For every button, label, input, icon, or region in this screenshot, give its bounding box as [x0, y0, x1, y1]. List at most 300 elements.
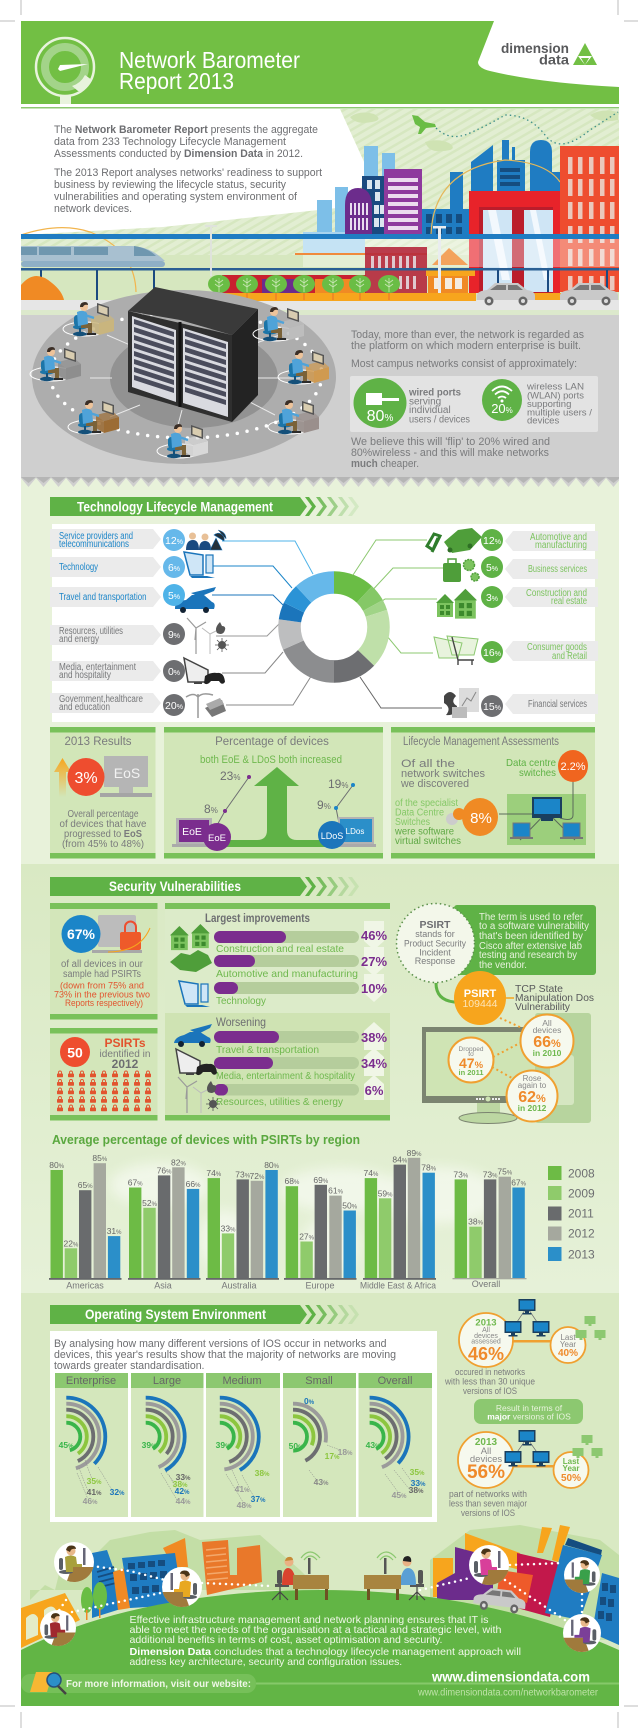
header banner: [21, 21, 619, 108]
intro text: [54, 124, 322, 215]
website bar: [21, 1670, 619, 1698]
chart: Medium: [181, 1373, 280, 1517]
closing text: address key architecture, security and configuration issues.: [130, 1656, 402, 1668]
icon: fountain: [21, 276, 70, 306]
panel: lifecycle management assessments: Switches: [395, 817, 430, 828]
callout: PSIRT definition: Incident: [419, 948, 451, 958]
chart: Enterprise: 46%: [83, 1496, 98, 1506]
chart: Overall: 38%: [409, 1485, 424, 1495]
sector chart panel: Consumer goods: [527, 642, 587, 653]
chart: Medium: 41%: [235, 1484, 250, 1494]
chart: Small: 50%: [289, 1441, 304, 1451]
bar chart: Middle East and Africa: 89%: [407, 1148, 422, 1158]
bar chart: Overall: Overall: [472, 1279, 500, 1289]
bar labels: Technology: [216, 995, 267, 1007]
heading: Security Vulnerabilities: [109, 878, 241, 894]
bar chart: Overall: 38%: [468, 1217, 484, 1227]
callout: PSIRT 109444: Vulnerability: [515, 1001, 571, 1013]
callout: PSIRT definition: The term is used to refer: [479, 912, 584, 923]
panel: 2013 results: [50, 727, 156, 858]
callout: 46 percent: devices: [474, 1333, 498, 1340]
intro text: network devices.: [54, 203, 132, 215]
text: campus networks: Most campus networks consist of approximately:: [351, 358, 577, 370]
sector chart panel: and Retail: [552, 651, 587, 662]
city scene: [21, 109, 619, 320]
chart: Small: 17%: [325, 1451, 340, 1461]
bar chart: Australia: 80%: [264, 1160, 280, 1170]
bar chart: Overall: [452, 1167, 527, 1289]
chart: Large: 38%: [173, 1479, 188, 1489]
LDoS device: 19%: [328, 777, 348, 791]
panel: 50 PSIRTs: identified in: [100, 1049, 150, 1060]
panel: lifecycle management assessments: 8%: [470, 810, 492, 827]
text: flip: [351, 436, 550, 470]
callout: PSIRT definition: Cisco after extensive lab: [479, 941, 582, 952]
left percent circles: 0%: [168, 666, 180, 678]
percentages: 46%: [361, 928, 387, 943]
text: flip: 80%wireless - and this will make networks: [351, 447, 549, 459]
wired ports: [354, 378, 470, 428]
callout: 56 percent: 2013: [475, 1437, 498, 1448]
panel: technology lifecycle management: [21, 487, 619, 864]
bar chart: Middle East and Africa: [360, 1148, 437, 1290]
stat bubble: 62 percent: again to: [518, 1081, 547, 1090]
closing text: Effective infrastructure management and network planning ensures that IT is: [130, 1614, 488, 1626]
right percent circles: 5%: [486, 562, 498, 574]
bar chart: Middle East and Africa: 74%: [363, 1168, 379, 1178]
chart: Small: Small: [305, 1375, 333, 1387]
bar labels: Automotive and manufacturing: [216, 968, 358, 980]
bar chart: Asia: [128, 1157, 201, 1290]
wireless ports: devices: [527, 416, 559, 426]
panel: 67 percent: [50, 903, 158, 1020]
bar chart: Asia: 67%: [128, 1178, 143, 1188]
sector chart panel: [50, 524, 598, 722]
panel: 67 percent: 73% in the previous two: [54, 990, 150, 1000]
closing text: able to meet the needs of the organisation at a tactical and strategic level, with: [130, 1624, 502, 1636]
chart: Enterprise: 35%: [87, 1476, 102, 1486]
wired ports: individual: [409, 405, 451, 416]
bar chart: Asia: 76%: [157, 1165, 172, 1175]
sector chart panel: Construction and: [526, 588, 587, 599]
network dots: [58, 1563, 582, 1620]
panel: 50 PSIRTs: 50: [67, 1044, 83, 1060]
chart: Large: 44%: [176, 1496, 191, 1506]
left percent circles: 20%: [165, 700, 183, 712]
pill: major versions: [474, 1399, 583, 1424]
sector chart panel: and hospitality: [59, 670, 111, 681]
donut chart: [290, 582, 378, 672]
heading: [50, 1305, 359, 1324]
bar chart: Australia: 73%: [235, 1169, 251, 1179]
white panel with charts: towards greater standardisation.: [54, 1360, 204, 1372]
people in circles: [40, 1542, 601, 1652]
monitor and tablet graphic: [422, 1013, 591, 1124]
panel: 2013 results: progressed to EoS: [64, 829, 142, 840]
monorail and train: [21, 225, 619, 300]
sector chart panel: Automotive and: [530, 532, 587, 543]
website bar: For more information, visit our website:: [66, 1678, 251, 1690]
panel: operating system environment: [21, 1293, 619, 1706]
stat bubble: 66 percent: All: [542, 1018, 552, 1028]
callout: PSIRT definition: PSIRT: [420, 919, 451, 931]
legend: 2013: [568, 1248, 595, 1262]
chart: Medium: 39%: [216, 1440, 231, 1450]
left percent circles: [163, 529, 185, 716]
bar chart: Middle East and Africa: 84%: [392, 1155, 408, 1165]
sector chart panel: Business services: [528, 564, 587, 575]
progress bars: [214, 931, 359, 1096]
panel: 50 PSIRTs: 2012: [112, 1057, 139, 1071]
callout: 46 percent: Year: [560, 1340, 576, 1349]
intro text: business by reviewing the lifecycle status, security: [54, 179, 286, 191]
chart: Enterprise: [27, 1373, 128, 1517]
sector chart panel: telecommunications: [59, 539, 129, 550]
EoE device: EoE: [208, 833, 226, 844]
bar chart: Americas: 85%: [92, 1153, 108, 1163]
panel: 67 percent: (down from 75% and: [60, 980, 144, 990]
stat bubble: 62 percent: [506, 1070, 558, 1122]
bar chart: Europe: 50%: [342, 1200, 358, 1210]
bar chart: Europe: Europe: [305, 1280, 335, 1290]
panel: lifecycle management assessments: [391, 727, 595, 858]
right percent circles: 16%: [483, 647, 501, 659]
left percent circles: 12%: [165, 535, 183, 547]
stat bubble: 62 percent: Rose: [523, 1074, 542, 1083]
EoE device: EoE: [182, 826, 202, 838]
bar chart: Australia: 33%: [221, 1223, 236, 1233]
trees: [208, 275, 400, 300]
intro text: vulnerabilities and operating system environment of: [54, 191, 298, 203]
bar chart: Americas: [49, 1153, 122, 1290]
car: [473, 1586, 527, 1615]
sector chart panel: Media, entertainment: [59, 662, 136, 673]
panel: 2013 results: EoS: [114, 765, 140, 781]
person at desk: left: [272, 1552, 329, 1600]
panel: 67 percent: of all devices in our: [61, 959, 144, 970]
bar chart: Europe: [284, 1175, 358, 1290]
panel: 67 percent: Reports respectively): [65, 998, 143, 1008]
wireless ports: wireless LAN: [526, 382, 584, 392]
bar labels: Travel & transportation: [216, 1044, 319, 1056]
bar chart: Americas: 80%: [49, 1160, 65, 1170]
callout: PSIRT 109444: Manipulation Dos: [515, 992, 594, 1004]
green hill: [21, 1590, 619, 1706]
panel: network: [21, 287, 619, 487]
icon: magnifier: [30, 1672, 66, 1694]
sector chart panel: Service providers and: [59, 531, 133, 542]
EoE device: 8%: [204, 802, 218, 816]
chart: Enterprise: 45%: [59, 1440, 74, 1450]
bar chart: Americas: 65%: [78, 1180, 93, 1190]
panel: lifecycle management assessments: virtual switches: [395, 836, 461, 847]
pill: major versions: Result in terms of: [496, 1403, 563, 1413]
chart: Medium: Medium: [222, 1375, 262, 1387]
callout: PSIRT definition: testing and research by: [479, 950, 577, 961]
text: flip: We believe this will 'flip' to 20% wired and: [351, 436, 550, 448]
text: campus networks: [351, 329, 584, 370]
closing text: [130, 1614, 521, 1668]
panel: percentage of devices: both EoE & LDoS both increased: [200, 754, 342, 766]
panel: 2013 results: 3%: [74, 770, 98, 787]
intro text: The 2013 Report analyses networks' readiness to support: [54, 167, 322, 179]
callout: PSIRT 109444: 109444: [462, 998, 498, 1010]
bar chart: Middle East and Africa: 59%: [378, 1188, 393, 1198]
panel: 2013 results: Overall percentage: [68, 809, 139, 820]
callout: 56 percent: Year: [563, 1464, 579, 1473]
panel: 2013 results: (from 45% to 48%): [62, 839, 144, 850]
callout: 46 percent: [459, 1299, 606, 1367]
wireless ports: 20%: [491, 401, 513, 416]
intro text: The Network Barometer Report presents the aggregate: [54, 124, 318, 136]
icon: barometer gauge: [36, 38, 94, 104]
sector chart panel: Technology: [59, 562, 98, 573]
logo: [501, 40, 597, 68]
panel: percentage of devices: [164, 727, 383, 858]
chart: Small: 0%: [304, 1396, 315, 1406]
bar chart: Australia: Australia: [221, 1280, 257, 1290]
stat bubble: 47 percent: [448, 1038, 494, 1082]
chart: Enterprise: 41%: [87, 1487, 102, 1497]
panel: improvements and worsening: Largest improvements: [205, 913, 310, 925]
sector chart panel: Travel and transportation: [59, 592, 146, 603]
wired ports: serving: [409, 396, 441, 408]
panel: lifecycle management assessments: switches: [519, 767, 556, 779]
stat bubble: 47 percent: Dropped: [459, 1046, 484, 1053]
callout: 56 percent: [458, 1430, 602, 1488]
left percent circles: 5%: [168, 590, 180, 602]
bar chart: Overall: 73%: [453, 1169, 469, 1179]
callout: PSIRT definition: [396, 904, 596, 982]
bar chart: Overall: 67%: [511, 1178, 527, 1188]
chart: Small: 43%: [314, 1477, 329, 1487]
right buildings: [433, 1525, 619, 1645]
chart: Overall: [331, 1373, 432, 1517]
callout: PSIRT 109444: PSIRT: [464, 988, 496, 1000]
sector chart panel: Government,healthcare: [59, 694, 143, 705]
legend: 2011: [568, 1206, 594, 1220]
chart: Overall: Overall: [378, 1375, 412, 1387]
white panel with charts: [27, 1331, 437, 1522]
text: campus networks: the platform on which modern enterprise is built.: [351, 340, 581, 352]
chart: Overall: 45%: [392, 1490, 407, 1500]
panel: lifecycle management assessments: Of all the: [401, 758, 455, 770]
text: 56 percent note: [449, 1489, 527, 1519]
callout: PSIRT definition: that's been identified by: [479, 931, 583, 942]
pill: major versions: major versions of IOS: [487, 1412, 571, 1422]
panel: lifecycle management assessments: network switches: [401, 768, 485, 780]
panel: 50 PSIRTs: [50, 1028, 158, 1120]
chart: Small: [260, 1373, 356, 1517]
bar chart: Middle East and Africa: 78%: [421, 1163, 437, 1173]
callout: PSIRT definition: stands for: [415, 929, 455, 939]
bar chart: Asia: 66%: [186, 1179, 201, 1189]
EoE device: [172, 769, 251, 851]
bar chart: Overall: 73%: [483, 1169, 498, 1179]
panel: 2013 results: of devices that have: [60, 819, 147, 830]
left buildings: [21, 1538, 262, 1648]
LDoS device: LDoS: [321, 831, 343, 841]
bar chart: Americas: Americas: [66, 1280, 104, 1290]
left percent circles: 9%: [168, 629, 180, 641]
intro text: Assessments conducted by Dimension Data in 2012.: [54, 148, 303, 160]
stat bubble: 47 percent: to: [468, 1051, 474, 1058]
chart: Large: [107, 1373, 204, 1517]
sector chart panel: and education: [59, 702, 110, 713]
chart: Medium: 37%: [251, 1494, 266, 1504]
bar chart: Europe: 69%: [313, 1175, 329, 1185]
closing text: additional benefits in terms of cost, asset optimisation and security.: [130, 1634, 442, 1646]
percentages: 34%: [361, 1056, 387, 1071]
bar chart: Australia: 72%: [249, 1171, 265, 1181]
percentages: 38%: [361, 1030, 387, 1045]
bar chart: Europe: 68%: [284, 1176, 300, 1186]
panel: lifecycle management assessments: were software: [394, 826, 454, 838]
logo: data: [539, 52, 569, 68]
panel: percentage of devices: Percentage of devices: [215, 736, 329, 748]
stat bubble: 66 percent: in 2010: [533, 1048, 562, 1058]
right percent circles: 3%: [486, 592, 498, 604]
callout: PSIRT 109444: TCP State: [515, 983, 563, 995]
connector lines: [212, 540, 444, 708]
callout: PSIRT definition: the vendor.: [479, 960, 527, 971]
street level: [21, 293, 619, 315]
chart: Overall: 43%: [366, 1440, 381, 1450]
panel: lifecycle management assessments: Data centre: [506, 757, 556, 769]
right labels: [505, 531, 598, 714]
text: 46 percent note: occured in networks: [455, 1367, 525, 1378]
bar labels: Media, entertainment & hospitality: [216, 1070, 356, 1082]
closing text: Dimension Data concludes that a technology lifecycle management approach will: [130, 1646, 521, 1658]
icon: plane: [412, 115, 436, 134]
white panel with charts: By analysing how many different versions of IOS occur in networks and: [54, 1338, 386, 1350]
bar chart: Middle East and Africa: Middle East & Africa: [360, 1280, 436, 1290]
bar chart: Americas: 22%: [63, 1238, 79, 1248]
text: 46 percent note: [444, 1367, 535, 1397]
panel: security vulnerabilities: [21, 864, 619, 1293]
right percent circles: 15%: [483, 701, 501, 713]
callout: 56 percent: 50%: [561, 1473, 581, 1484]
panel: lifecycle management assessments: of the specialist: [395, 798, 458, 809]
chart: Overall: 35%: [410, 1467, 425, 1477]
percentages: 6%: [365, 1083, 384, 1098]
icon grid: padlocks: [57, 1071, 151, 1111]
bar chart: Europe: 61%: [328, 1186, 344, 1196]
workers: [30, 302, 329, 458]
callout: 46 percent: Last: [560, 1333, 576, 1342]
callout: 56 percent: All: [481, 1446, 491, 1457]
bar chart: Europe: 27%: [299, 1232, 315, 1242]
text: campus networks: Today, more than ever, the network is regarded as: [351, 329, 584, 341]
wired and wireless box: [350, 376, 598, 432]
callout: 46 percent: All: [482, 1327, 490, 1334]
LDoS device: [317, 777, 376, 849]
world map backdrop: [110, 1163, 500, 1273]
heading: [50, 497, 359, 516]
heading: [50, 877, 359, 896]
website bar: www.dimensiondata.com/networkbarometer: [417, 1688, 599, 1698]
skyline buildings: [222, 140, 619, 293]
bar labels: Construction and real estate: [216, 943, 344, 955]
sector chart panel: Resources, utilities: [59, 626, 123, 637]
arrows: [364, 921, 384, 1100]
stat bubble: 62 percent: in 2012: [518, 1103, 547, 1113]
panel: 50 PSIRTs: PSIRTs: [104, 1036, 146, 1050]
left icons: [175, 530, 229, 718]
chart: Enterprise: 32%: [110, 1487, 125, 1497]
percentages: 27%: [361, 954, 387, 969]
wireless ports: [482, 379, 592, 426]
text: flip: much cheaper.: [351, 458, 419, 470]
text: 56 percent note: less than seven major: [449, 1498, 527, 1510]
left labels: [50, 529, 161, 713]
callout: PSIRT definition: Product Security: [404, 938, 466, 948]
panel: 2013 results: 2013 Results: [64, 736, 132, 748]
callout: 56 percent: 56%: [467, 1462, 505, 1483]
legend: 2008: [568, 1166, 595, 1180]
panel: improvements and worsening: [165, 903, 390, 1120]
title: Report 2013: [119, 68, 234, 94]
website bar: www.dimensiondata.com: [431, 1670, 590, 1684]
sector chart panel: real estate: [551, 596, 587, 607]
panel: lifecycle management assessments: Lifecycle Management Assessments: [403, 736, 559, 748]
logo: dimension: [501, 40, 569, 56]
icon: server cabinets: [128, 287, 258, 422]
chart: Large: 33%: [176, 1472, 191, 1482]
legend: [548, 1166, 595, 1262]
LDoS device: LDos: [346, 827, 364, 836]
sector chart panel: and energy: [59, 634, 99, 645]
wireless ports: multiple users /: [527, 408, 592, 418]
chart: Large: 42%: [175, 1486, 190, 1496]
title: Network Barometer: [119, 47, 300, 73]
callout: PSIRT 109444: [436, 971, 594, 1025]
wireless ports: supporting: [527, 399, 571, 410]
wireless ports: (WLAN) ports: [527, 390, 584, 402]
stat bubble: 66 percent: devices: [533, 1025, 561, 1035]
percentages: [361, 928, 387, 1098]
bar chart: Australia: [206, 1160, 280, 1290]
skyline silhouettes: [30, 1525, 619, 1640]
sector chart panel: Financial services: [528, 699, 587, 710]
legend: 2009: [568, 1186, 595, 1200]
text: 46 percent note: versions of IOS: [463, 1386, 517, 1397]
heading: Technology Lifecycle Management: [77, 498, 273, 514]
left percent circles: 6%: [168, 562, 180, 574]
panel: lifecycle management assessments: we discovered: [400, 778, 469, 790]
intro text: data from 233 Technology Lifecycle Management: [54, 136, 286, 148]
chart: Enterprise: Enterprise: [66, 1375, 116, 1387]
callout: 46 percent: assessed: [471, 1338, 501, 1346]
bar labels: [216, 943, 358, 1108]
icon: big up arrow: [203, 767, 358, 847]
sector chart panel: manufacturing: [535, 540, 587, 551]
bar icons: [170, 924, 220, 1113]
LDoS device: 9%: [317, 798, 331, 812]
text: 46 percent note: with less than 30 unique: [444, 1376, 535, 1388]
chart: Small: 18%: [338, 1447, 353, 1457]
bar chart: Overall: 75%: [497, 1167, 513, 1177]
legend: 2012: [568, 1226, 595, 1240]
callout: PSIRT definition: to a software vulnerability: [479, 921, 589, 932]
right icons: [427, 528, 482, 718]
heading: Operating System Environment: [85, 1306, 266, 1322]
bar labels: Resources, utilities & energy: [216, 1096, 344, 1108]
chart: Medium: 38%: [255, 1468, 270, 1478]
percentages: 10%: [361, 981, 387, 996]
callout: 56 percent: Last: [563, 1457, 580, 1466]
bar chart: Asia: 52%: [142, 1198, 158, 1208]
